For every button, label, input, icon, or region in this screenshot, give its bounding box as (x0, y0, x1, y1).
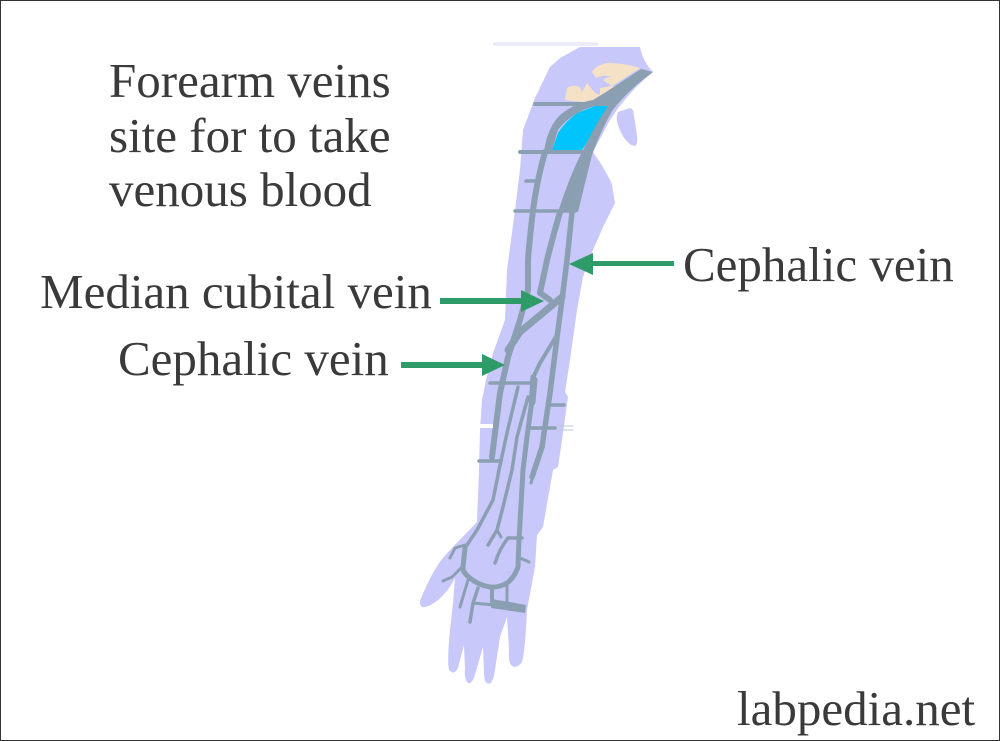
wrist band (491, 599, 526, 613)
title: venous blood (109, 162, 372, 217)
blue area (552, 106, 608, 150)
arrow: to left cephalic vein (401, 354, 505, 376)
title: site for to take (109, 108, 391, 163)
main upper band (544, 69, 653, 212)
label: cephalic vein left: Cephalic vein (118, 331, 389, 386)
label: cephalic vein right: Cephalic vein (683, 237, 954, 292)
shoulder tissue: beige (565, 63, 640, 102)
title: Forearm veins (109, 53, 391, 108)
illustration: arm with veins (420, 43, 653, 684)
median cubital (508, 297, 562, 350)
notch (477, 424, 493, 428)
hand veins (495, 538, 522, 563)
upper arm veins (492, 152, 545, 457)
lower arm veins (532, 335, 557, 380)
palm arch vein (463, 377, 533, 587)
arm silhouette (420, 47, 653, 684)
arrow: to median cubital vein (440, 290, 544, 312)
shoulder side lobe (617, 108, 637, 146)
veins (443, 69, 653, 622)
label: median cubital vein: Median cubital vein (40, 264, 432, 319)
title (109, 53, 391, 217)
arrow: to right cephalic vein (569, 253, 674, 275)
watermark: labpedia.net (737, 681, 975, 736)
top sliver (494, 43, 597, 45)
